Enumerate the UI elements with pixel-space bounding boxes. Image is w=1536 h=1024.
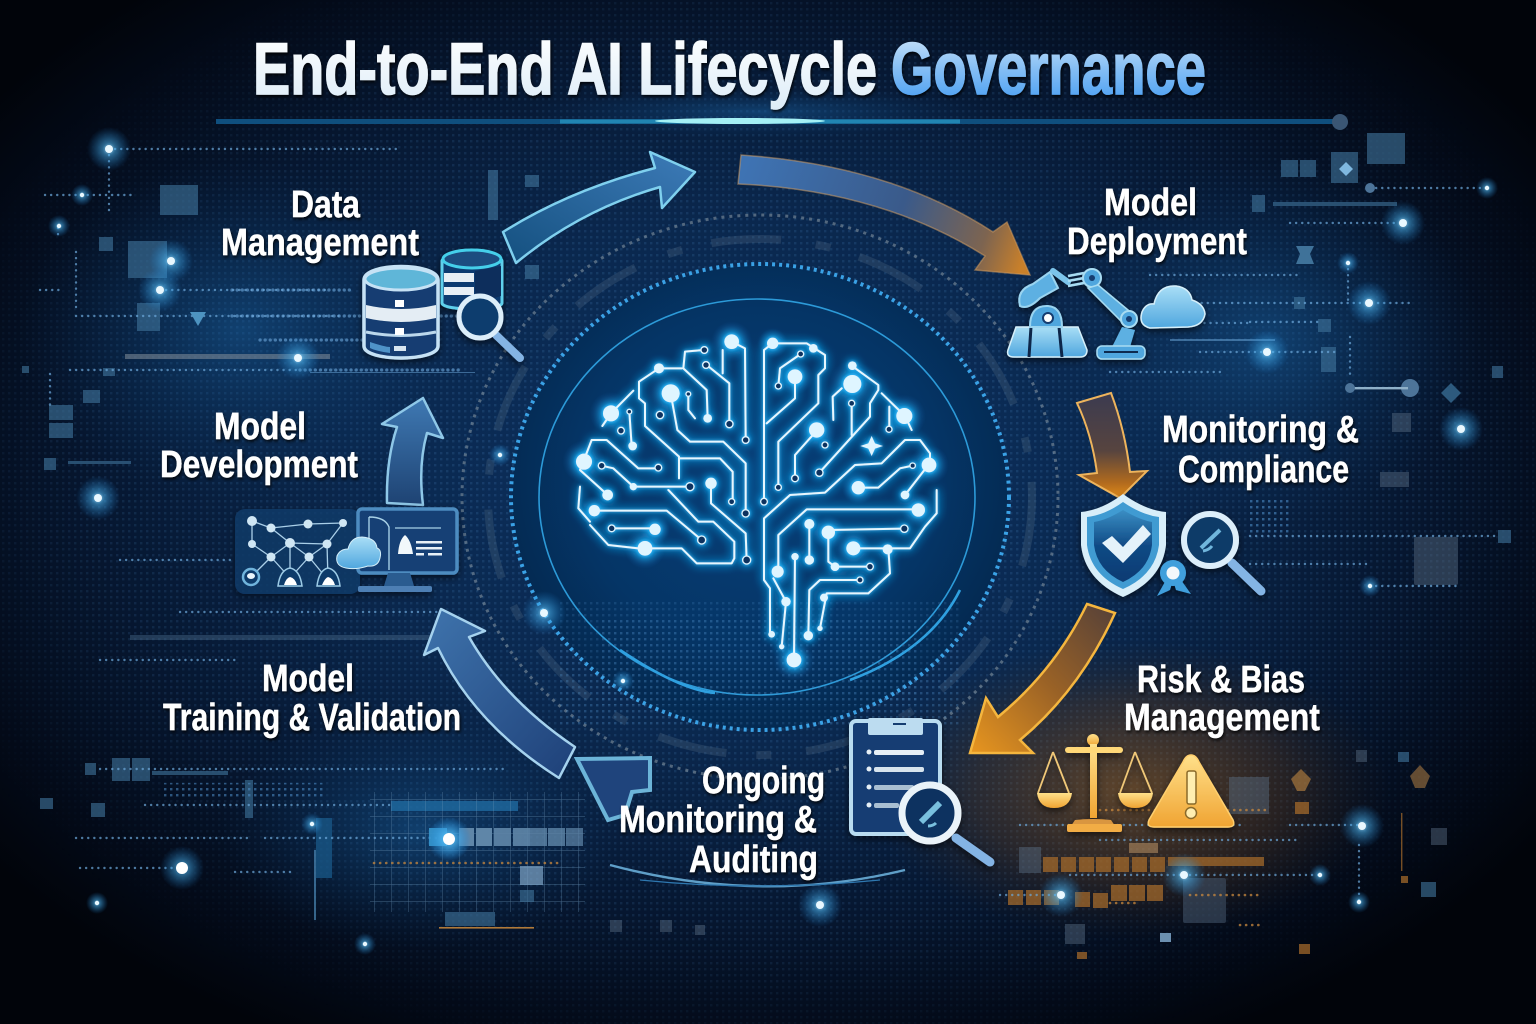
- icon: scales and warning triangle: [1037, 734, 1234, 832]
- label: monitoring and compliance: [1162, 409, 1359, 491]
- label: monitoring and compliance: Monitoring &: [1162, 409, 1359, 451]
- arrow tail fragment near ongoing monitoring: [577, 758, 650, 820]
- title divider: [216, 86, 1348, 138]
- label: data management: Data: [291, 184, 361, 226]
- label: model development: [160, 406, 358, 486]
- label: model deployment: Deployment: [1067, 221, 1247, 263]
- label: ongoing monitoring and auditing: Ongoing: [702, 760, 825, 802]
- label: model training and validation: [163, 658, 461, 739]
- arrow: development to data: [382, 398, 443, 505]
- label: data management: [221, 184, 419, 264]
- label: data management: Management: [221, 222, 419, 264]
- brain circuit: [562, 321, 949, 681]
- label: model deployment: Model: [1104, 182, 1197, 224]
- label: risk and bias management: [1124, 659, 1320, 739]
- label: model development: Model: [214, 406, 306, 448]
- title: Governance: [891, 29, 1206, 110]
- central rings: [462, 215, 1058, 886]
- label: ongoing monitoring and auditing: Monitoring &: [619, 799, 817, 841]
- arrow: top right toward model deployment: [738, 155, 1030, 275]
- label: monitoring and compliance: Compliance: [1178, 449, 1349, 491]
- arrow: auditing to training: [424, 609, 575, 778]
- arrow: data management to deployment, upper left: [503, 152, 695, 263]
- icon: clipboard and magnifier: [851, 718, 990, 862]
- icon: databases with magnifier: [364, 250, 520, 358]
- label: model training and validation: Model: [262, 658, 354, 700]
- icon: robot arm and cloud: [1008, 269, 1205, 359]
- label: ongoing monitoring and auditing: [619, 760, 825, 881]
- label: risk and bias management: Risk & Bias: [1137, 659, 1305, 701]
- title: End-to-End AI Lifecycle: [253, 29, 877, 110]
- label: model deployment: [1067, 182, 1247, 263]
- label: risk and bias management: Management: [1124, 697, 1320, 739]
- icon: shield, ribbon and magnifier: [1081, 494, 1261, 597]
- label: model training and validation: Training & Validation: [163, 697, 461, 739]
- arrow: deployment to monitoring: [1077, 393, 1147, 498]
- label: model development: Development: [160, 444, 358, 486]
- label: ongoing monitoring and auditing: Auditing: [689, 839, 818, 881]
- arrow: monitoring to risk: [970, 604, 1115, 753]
- icon: neural network and monitor: [235, 509, 457, 594]
